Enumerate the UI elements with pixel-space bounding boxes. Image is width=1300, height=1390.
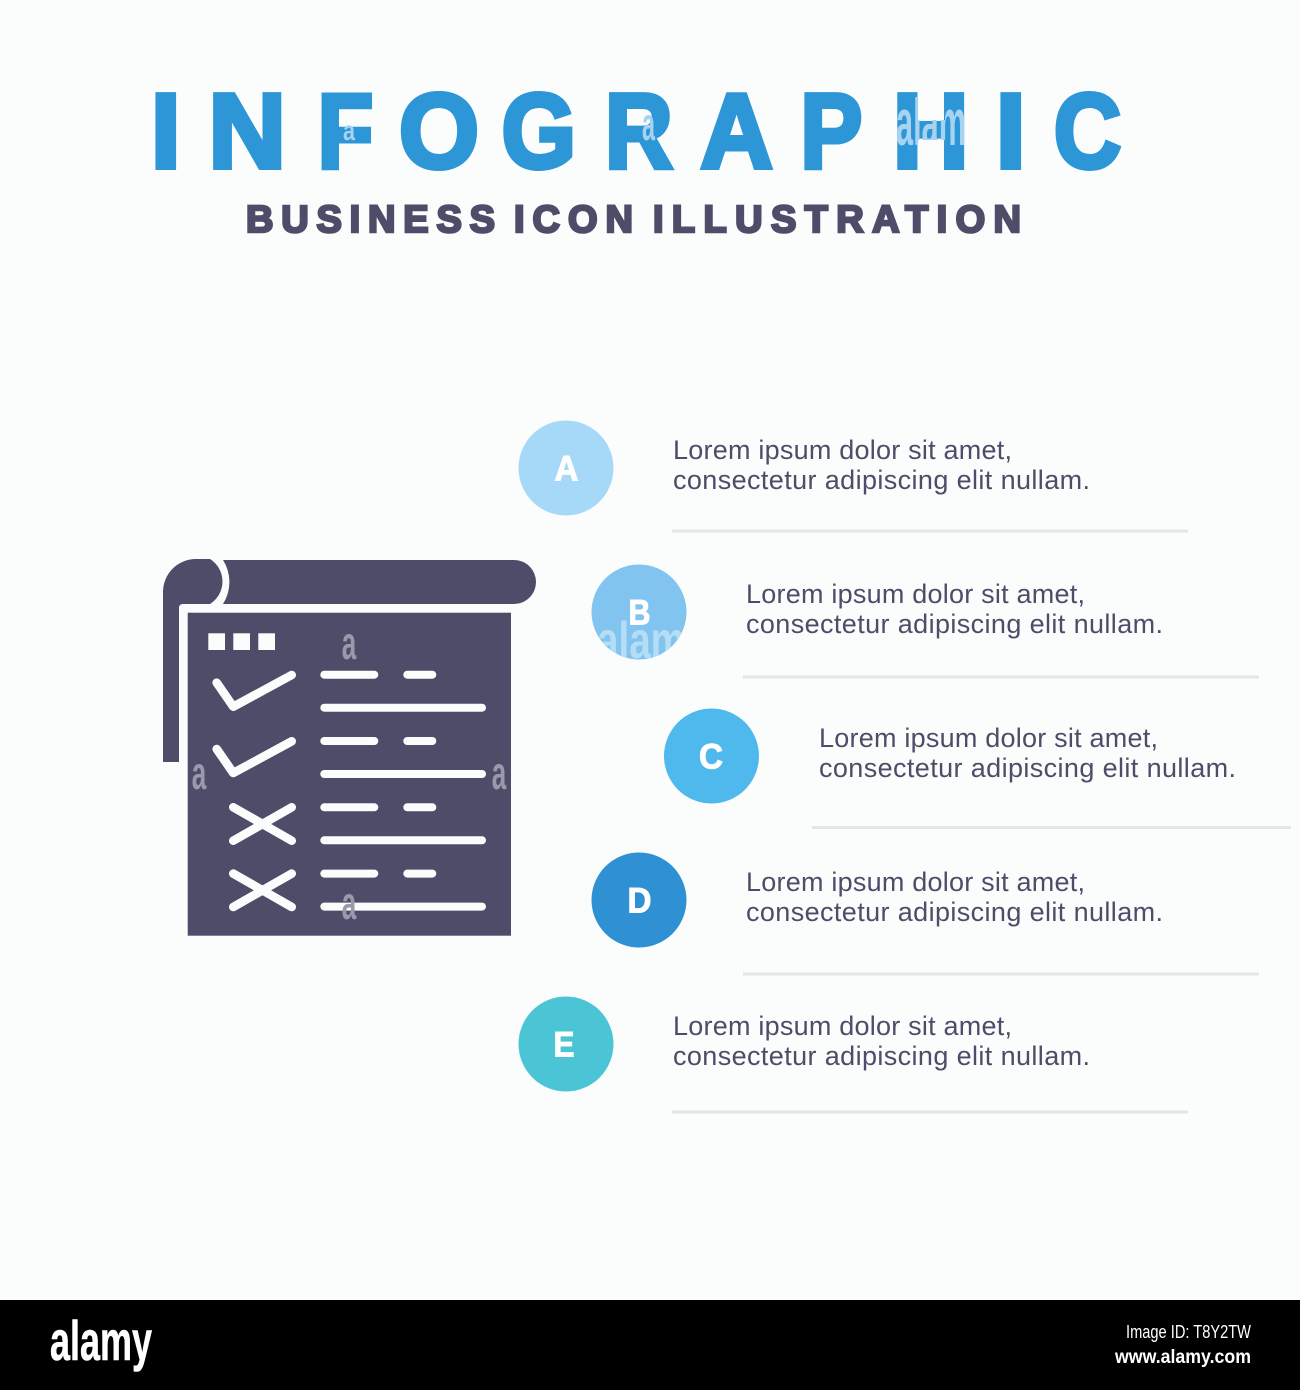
subtitle: ILLUSTRATION <box>653 199 1021 241</box>
watermark marks on icon: a <box>192 747 206 799</box>
title: O <box>399 72 479 190</box>
title: R <box>605 72 673 190</box>
text A: Lorem ipsum dolor sit amet, <box>673 435 1012 465</box>
title: A <box>700 72 773 190</box>
watermark marks on icon: a <box>492 747 506 799</box>
watermark marks on icon: a <box>342 877 356 929</box>
text E: Lorem ipsum dolor sit amet, <box>673 1011 1012 1041</box>
title: a <box>642 98 655 150</box>
text B: Lorem ipsum dolor sit amet, <box>746 579 1085 609</box>
item D <box>592 852 1259 976</box>
letter E: E <box>554 1026 574 1064</box>
roll curl <box>163 559 223 762</box>
image id: Image ID: T8Y2TW <box>1126 1322 1251 1342</box>
watermark on badge B: alam <box>597 612 685 670</box>
subtitle: BUSINESS <box>246 199 495 241</box>
footer logo: alamy <box>50 1309 152 1372</box>
watermark marks on icon: a <box>342 617 356 669</box>
badge A <box>518 420 614 516</box>
item A <box>518 420 1188 532</box>
letter C: C <box>699 738 723 776</box>
letter D: D <box>628 882 652 920</box>
subtitle <box>246 199 1021 241</box>
title: G <box>502 72 576 190</box>
letter B: B <box>628 594 650 632</box>
checklist page <box>188 613 511 936</box>
text B: consectetur adipiscing elit nullam. <box>746 609 1163 639</box>
title: C <box>1054 72 1121 190</box>
title: N <box>208 72 286 190</box>
footer bar <box>0 1300 1300 1390</box>
badge C <box>664 708 759 804</box>
list lines <box>324 675 482 907</box>
title: I <box>996 72 1026 190</box>
title: alam <box>896 85 966 159</box>
title: F <box>318 72 373 190</box>
title: a <box>343 115 355 146</box>
item E <box>518 996 1188 1114</box>
title: H <box>893 72 969 190</box>
subtitle: ICON <box>514 199 633 241</box>
website: www.alamy.com <box>1114 1347 1251 1368</box>
item B <box>592 564 1259 678</box>
item C <box>664 708 1291 829</box>
roll bar <box>223 560 536 604</box>
text C: Lorem ipsum dolor sit amet, <box>819 723 1158 753</box>
header squares <box>208 633 275 650</box>
title: I <box>151 72 181 190</box>
title <box>155 91 1122 171</box>
text C: consectetur adipiscing elit nullam. <box>819 753 1236 783</box>
title: P <box>800 72 862 190</box>
text E: consectetur adipiscing elit nullam. <box>673 1041 1090 1071</box>
icon: checklist scroll <box>163 559 536 936</box>
badge B <box>592 564 686 660</box>
text D: Lorem ipsum dolor sit amet, <box>746 867 1085 897</box>
badge E <box>518 996 614 1092</box>
badge D <box>592 852 686 948</box>
check and cross marks <box>217 675 292 907</box>
letter A: A <box>554 450 578 488</box>
text A: consectetur adipiscing elit nullam. <box>673 465 1090 495</box>
watermark marks on icon <box>192 617 506 929</box>
text D: consectetur adipiscing elit nullam. <box>746 897 1163 927</box>
